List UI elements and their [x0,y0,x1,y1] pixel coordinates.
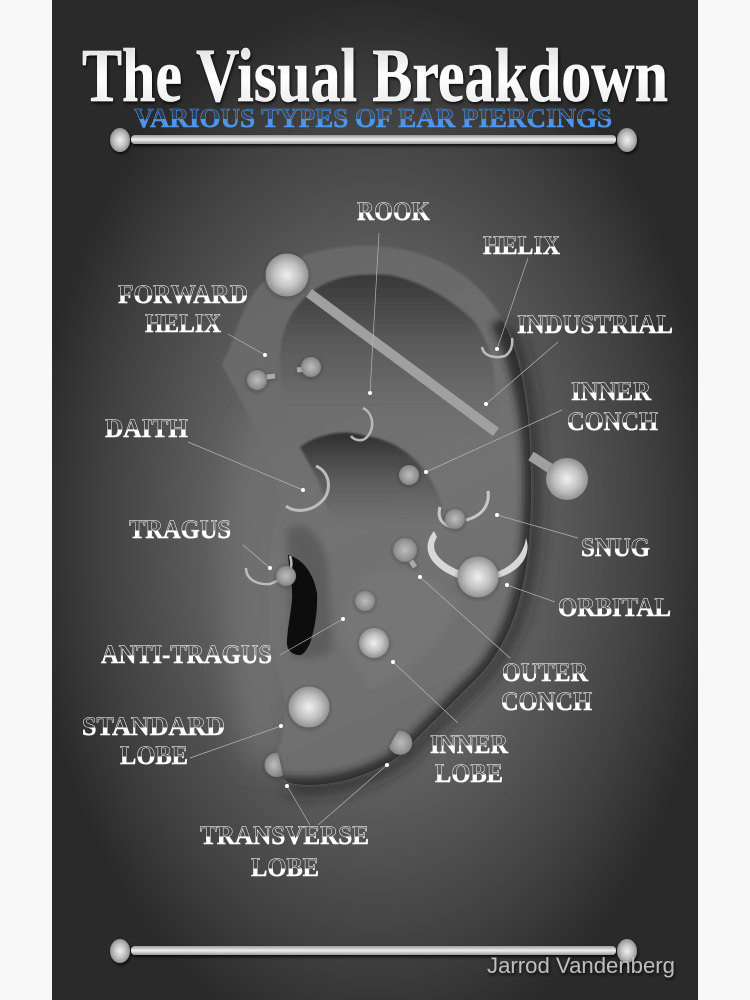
snug ring [439,491,488,527]
ear illustration [222,246,588,787]
artist credit: Jarrod Vandenberg [487,953,675,978]
label: outer conch: CONCH [501,687,592,716]
label: standard lobe: STANDARD [82,712,225,741]
label: daith: DAITH [105,414,188,443]
label: forward helix [118,280,248,338]
orbital ring [428,531,528,578]
label: inner lobe: INNER [430,730,508,759]
label: tragus: TRAGUS [129,515,231,544]
label: orbital: ORBITAL [558,593,671,622]
label: inner conch [567,377,658,436]
label: rook: ROOK [357,197,431,226]
concha bowl [300,433,450,532]
ear shadow on background [288,325,533,787]
label: outer conch: OUTER [502,658,588,687]
scapha hollow [280,275,496,450]
label: transverse lobe [200,821,369,882]
industrial barbell [309,293,588,500]
label: inner lobe: LOBE [435,759,503,788]
label: forward helix: HELIX [145,309,221,338]
tragus ring [246,556,292,584]
ear canal opening [287,555,317,655]
top barbell divider [110,128,637,152]
label: transverse lobe: TRANSVERSE [200,821,369,850]
canal surround [287,525,332,658]
label: standard lobe: LOBE [120,741,188,770]
rook ring [351,408,372,440]
ear silhouette [222,246,531,785]
head side blending into ear [228,415,296,765]
label: outer conch [501,658,592,716]
label: industrial: INDUSTRIAL [517,310,673,339]
antihelix bump [340,568,460,690]
leader lines [188,233,578,825]
label: helix: HELIX [483,231,560,260]
label: forward helix: FORWARD [118,280,248,309]
studs [247,357,465,777]
bottom barbell divider [110,939,637,963]
label: snug: SNUG [581,533,650,562]
large balls [266,254,498,728]
label: inner conch: INNER [571,377,651,406]
daith ring [286,466,328,510]
helix ring [482,338,512,357]
label: inner conch: CONCH [567,407,658,436]
label: anti-tragus: ANTI-TRAGUS [101,640,272,669]
subtitle: VARIOUS TYPES OF EAR PIERCINGS [134,103,612,133]
label: inner lobe [430,730,508,788]
label: standard lobe [82,712,225,770]
helix and lobe inner shading [280,320,533,787]
label: transverse lobe: LOBE [251,853,319,882]
